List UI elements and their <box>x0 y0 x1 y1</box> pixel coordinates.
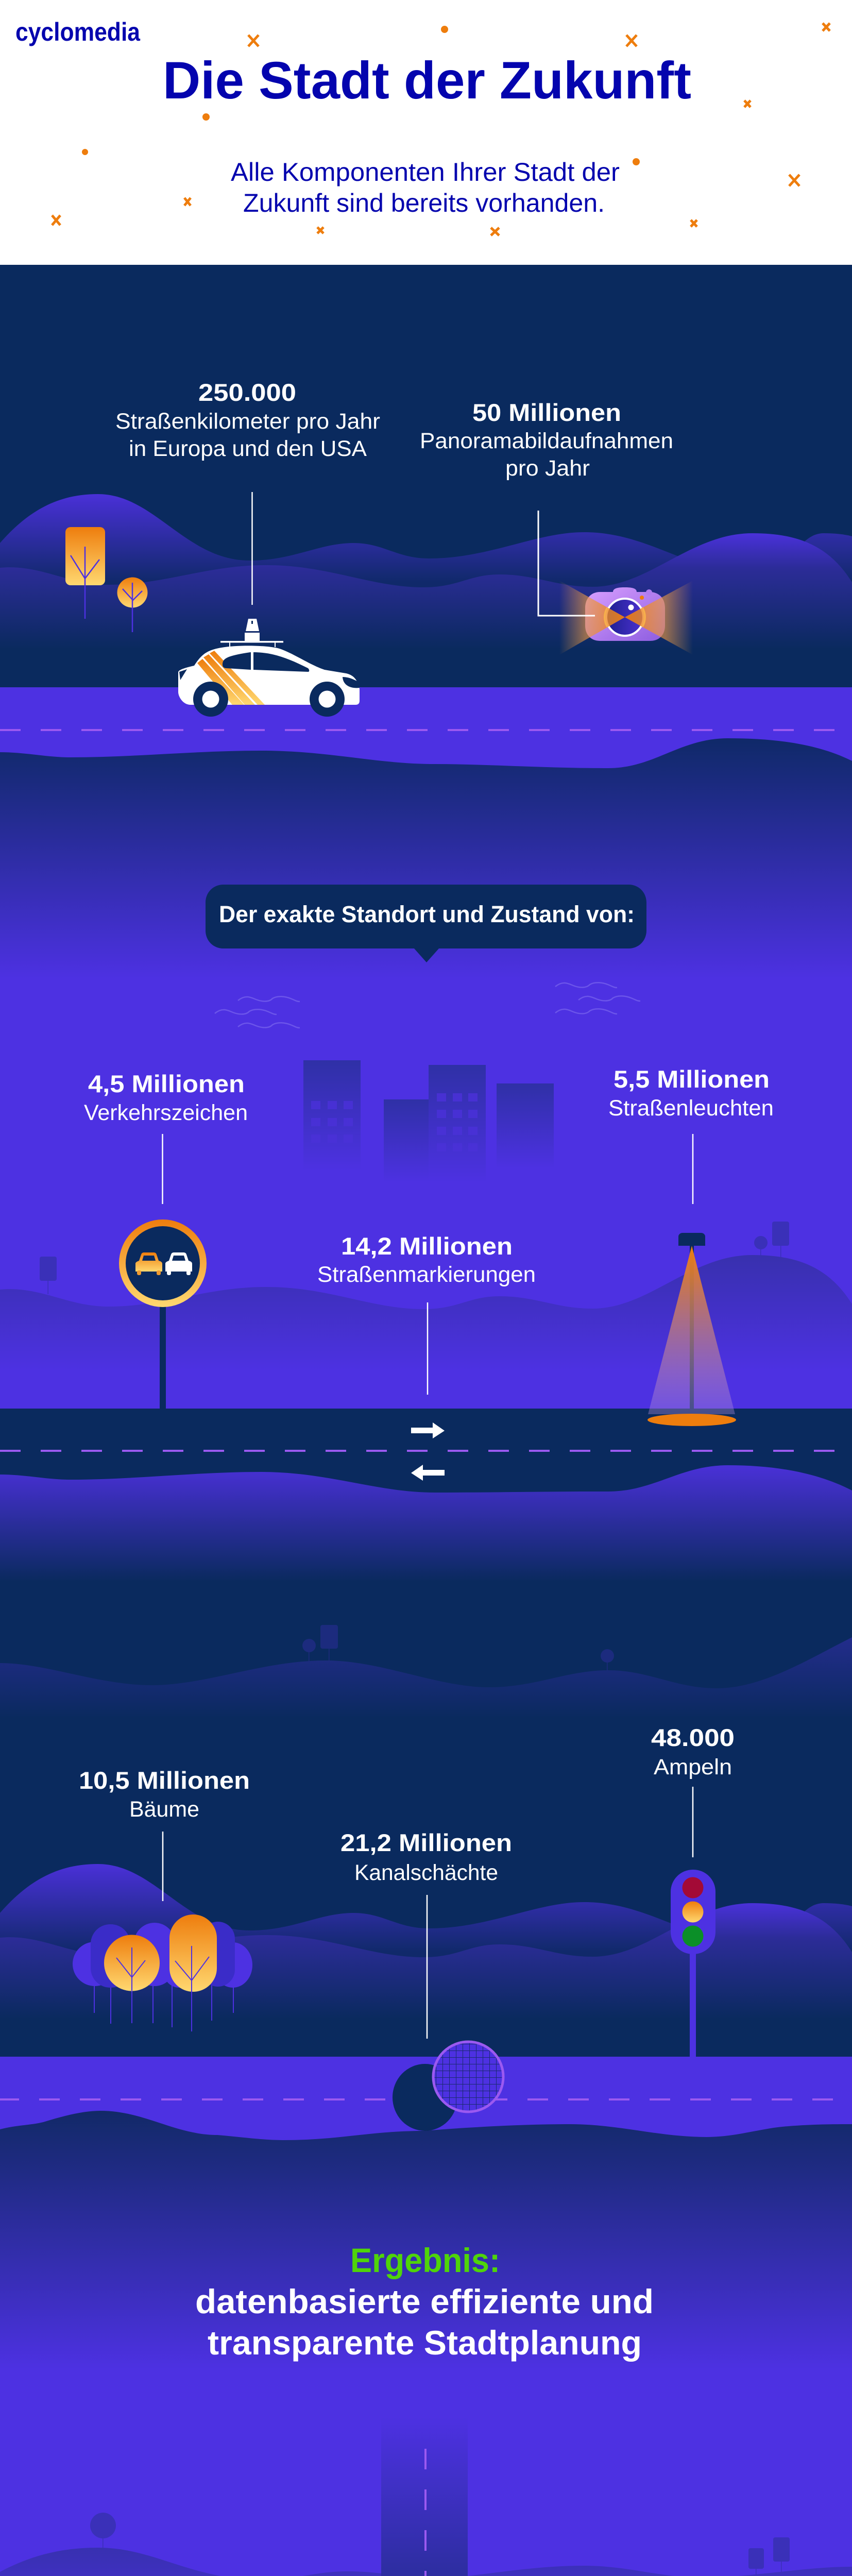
faint hills <box>0 1637 852 1721</box>
road 2 <box>0 1409 852 1527</box>
subtitle: Alle Komponenten Ihrer Stadt der <box>231 158 620 187</box>
stat: Kanalschächte <box>340 1829 512 1885</box>
icon: camera <box>559 581 693 655</box>
result heading: datenbasierte effiziente und <box>195 2282 654 2320</box>
icon: tall tree <box>65 527 105 619</box>
back hills <box>0 494 852 618</box>
back hills <box>0 1864 852 1988</box>
result heading <box>195 2241 654 2362</box>
mid hills <box>0 1255 852 1412</box>
icon: tree cluster <box>73 1914 252 2031</box>
road 1 <box>0 687 852 780</box>
subtitle: Zukunft sind bereits vorhanden. <box>243 189 605 217</box>
result heading: transparente Stadtplanung <box>208 2324 642 2362</box>
stat: 250.000 Straßenkilometer: in Europa und den USA <box>129 436 367 461</box>
vertical road <box>381 2417 468 2576</box>
stat: 50 Millionen Panoramabildaufnahmen: 50 Millionen <box>472 399 621 426</box>
road 3 <box>0 2057 852 2160</box>
stat: Straßenmarkierungen: 14,2 Millionen <box>341 1232 513 1260</box>
stat: Ampeln: 48.000 <box>651 1724 735 1751</box>
icon: traffic sign <box>119 1219 207 1410</box>
stat: Verkehrszeichen: 4,5 Millionen <box>88 1070 245 1097</box>
stat: Ampeln <box>651 1724 735 1780</box>
icon: survey car side view <box>178 619 360 717</box>
white car <box>165 1252 192 1275</box>
stat: 50 Millionen Panoramabildaufnahmen <box>420 399 673 481</box>
stat: Bäume: 10,5 Millionen <box>79 1767 250 1794</box>
icon: traffic light <box>671 1870 715 2058</box>
clouds: squiggles left <box>215 996 300 1028</box>
stat: Straßenmarkierungen <box>317 1232 536 1287</box>
stat: Kanalschächte: 21,2 Millionen <box>340 1829 512 1856</box>
section: data capture (night sky) <box>0 265 852 692</box>
result heading: Ergebnis: <box>350 2241 500 2279</box>
subtitle <box>231 158 620 217</box>
section: trees, manholes, lights <box>0 1465 852 2061</box>
leader line: trees <box>162 1832 163 1901</box>
icon: round tree <box>117 577 147 632</box>
speech bubble <box>206 885 646 962</box>
stat: Verkehrszeichen: Verkehrszeichen <box>84 1100 248 1125</box>
section: assets on purple field <box>0 738 852 1412</box>
stat: Verkehrszeichen <box>84 1070 248 1125</box>
stat: Bäume <box>79 1767 250 1822</box>
stat: 250.000 Straßenkilometer <box>115 379 380 461</box>
speech bubble: Der exakte Standort und Zustand von: <box>219 901 635 927</box>
header panel <box>0 0 852 265</box>
background trees <box>40 1222 789 1294</box>
stat: Straßenmarkierungen: Straßenmarkierungen <box>317 1262 536 1287</box>
stat: Kanalschächte: Kanalschächte <box>354 1860 498 1885</box>
stat: 50 Millionen Panoramabildaufnahmen: pro Jahr <box>505 456 590 481</box>
leader line: traffic light <box>692 1787 693 1857</box>
decorative orange marks <box>52 23 830 235</box>
stat: 250.000 Straßenkilometer: 250.000 <box>198 379 296 406</box>
leader line: car <box>251 492 253 605</box>
arrow right <box>411 1422 445 1438</box>
stat: Straßenleuchten: 5,5 Millionen <box>614 1065 770 1093</box>
leader line: lamp <box>692 1134 693 1204</box>
leader line: markings <box>427 1302 428 1395</box>
stat: Straßenleuchten: Straßenleuchten <box>608 1096 774 1121</box>
stat: Bäume: Bäume <box>129 1797 199 1822</box>
stat: Straßenleuchten <box>608 1065 774 1121</box>
faint trees <box>302 1625 614 1673</box>
city silhouette <box>303 1060 554 1182</box>
title: Die Stadt der Zukunft <box>163 51 691 110</box>
front hills <box>0 1903 852 2060</box>
leader line: camera <box>538 511 595 616</box>
arrow left <box>411 1465 445 1481</box>
front hills <box>0 533 852 690</box>
icon: street lamp <box>647 1233 736 1426</box>
clouds: squiggles right <box>555 982 640 1014</box>
stat: Ampeln: Ampeln <box>654 1755 732 1780</box>
section: result <box>0 2041 852 2576</box>
logo: cyclomedia: cyclomedia <box>15 18 141 46</box>
icon: open manhole <box>393 2041 505 2131</box>
orange car <box>135 1252 162 1275</box>
leader line: manhole <box>427 1895 428 2039</box>
leader line: sign <box>162 1134 163 1204</box>
faint hills and trees <box>0 2513 852 2576</box>
stat: 250.000 Straßenkilometer: Straßenkilometer pro Jahr <box>115 409 380 434</box>
stat: 50 Millionen Panoramabildaufnahmen: Panoramabildaufnahmen <box>420 429 673 453</box>
